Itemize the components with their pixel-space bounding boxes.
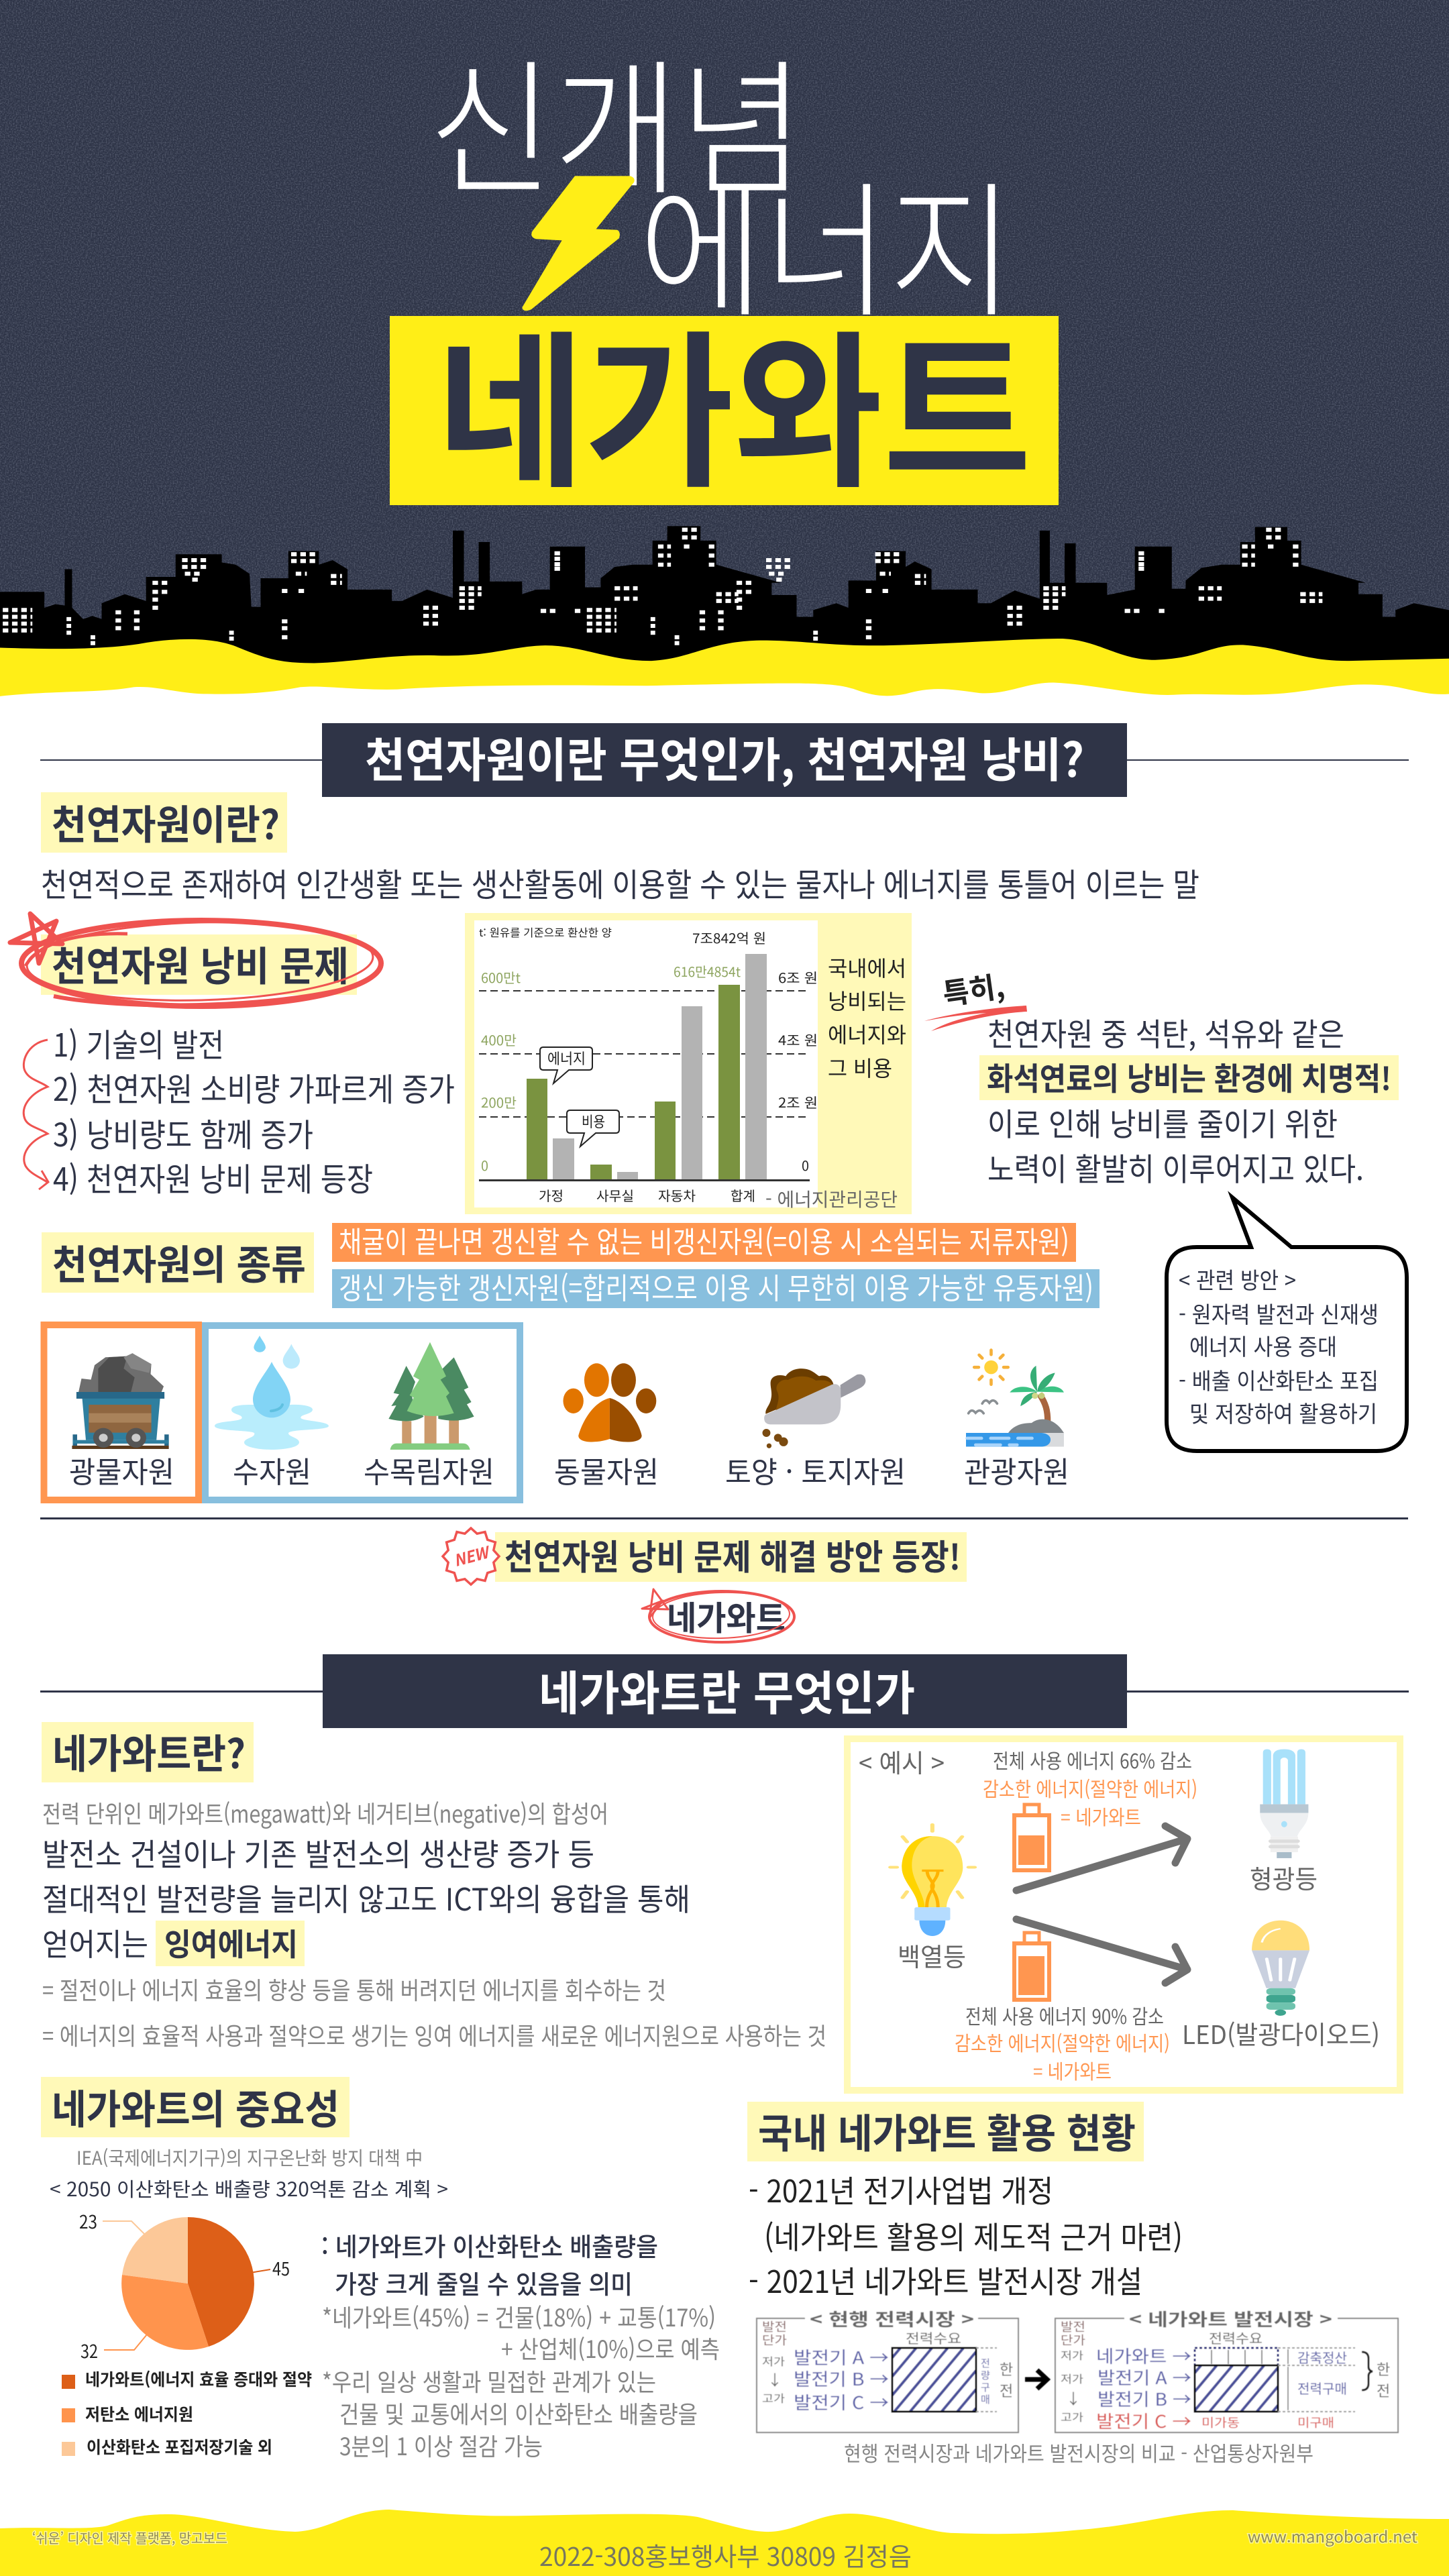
- arrow: to LED: [1016, 1919, 1187, 1983]
- text block: importance: *네가와트(45%) = 건물(18%) + 교통(17%): [322, 2299, 716, 2334]
- heading: 네가와트의 중요성: 네가와트의 중요성: [52, 2078, 339, 2136]
- label: 수목림자원: 수목림자원: [364, 1448, 494, 1491]
- chart labels: 자동차: [658, 1185, 696, 1205]
- right market: 미구매: [1297, 2414, 1334, 2431]
- section header: 네가와트: [40, 1654, 1409, 1728]
- red star: [10, 914, 62, 963]
- text: LED savings: [955, 2000, 1170, 2085]
- chart labels: 0: [802, 1155, 809, 1175]
- icon: beach: [966, 1350, 1064, 1447]
- footer credit left: ‘쉬운’ 디자인 제작 플랫폼, 망고보드: [32, 2528, 227, 2547]
- label: 수자원: 수자원: [233, 1448, 311, 1491]
- left market: [757, 2306, 1018, 2432]
- right market: 한: [1377, 2358, 1390, 2379]
- icon: battery 66%: [1012, 1805, 1051, 1872]
- right market: 발전기 A →: [1097, 2365, 1191, 2390]
- icon: mine cart: [72, 1353, 169, 1449]
- yellow wave: [0, 639, 1449, 696]
- icon: forest: [388, 1342, 474, 1450]
- title box: 네가와트: 네가와트: [436, 278, 1032, 521]
- values: 45: [272, 2255, 290, 2281]
- section header: 천연자원: [40, 723, 1409, 797]
- callout heading: 특히: [924, 963, 1027, 1031]
- chart labels: 200만: [481, 1092, 517, 1112]
- speech bubble: 관련 방안: [1167, 1197, 1407, 1451]
- highlight: 잉여에너지: [156, 1921, 305, 1966]
- footer url: www.mangoboard.net: [1248, 2524, 1417, 2547]
- heading: 천연자원 낭비 문제: [10, 914, 381, 1006]
- legend: [62, 2367, 312, 2459]
- label: 관광자원: 관광자원: [964, 1448, 1069, 1491]
- legend: 네가와트(에너지 효율 증대와 절약: [85, 2367, 312, 2391]
- label: 백열등: 백열등: [898, 1937, 966, 1974]
- speech bubble: 관련 방안: - 배출 이산화탄소 포집: [1179, 1363, 1379, 1396]
- heading: 천연자원이란?: 천연자원이란?: [52, 793, 280, 851]
- text: fluorescent savings: 감소한 에너지(절약한 에너지): [983, 1773, 1197, 1803]
- right market: 전력구매: [1297, 2378, 1347, 2398]
- text block: domestic status: (네가와트 활용의 제도적 근거 마련): [764, 2214, 1183, 2258]
- right market: 네가와트 →: [1096, 2343, 1191, 2368]
- icon: NEW badge: NEW: [451, 1539, 493, 1571]
- text block: domestic status: - 2021년 네가와트 발전시장 개설: [749, 2258, 1142, 2302]
- left market: ↓: [767, 2369, 782, 2390]
- icon: incandescent bulb: [890, 1825, 975, 1936]
- chart labels: 4조 원: [778, 1030, 818, 1049]
- icon: soil scoop: [762, 1368, 865, 1448]
- speech bubble: 관련 방안: < 관련 방안 >: [1179, 1263, 1296, 1295]
- chart labels: 0: [481, 1155, 488, 1175]
- icon: water: [215, 1336, 329, 1450]
- text block: domestic status: [749, 2167, 1183, 2302]
- text: IEA note: IEA(국제에너지기구)의 지구온난화 방지 대책 中: [76, 2144, 423, 2171]
- right market: 발전기 B →: [1097, 2386, 1191, 2411]
- band: 갱신자원: 갱신 가능한 갱신자원(=합리적으로 이용 시 무한히 이용 가능한 유동자원): [339, 1265, 1093, 1307]
- right market: 고가: [1061, 2408, 1083, 2424]
- speech bubble: 관련 방안: 에너지 사용 증대: [1189, 1329, 1337, 1362]
- highlight: [979, 1055, 1399, 1100]
- banner: solution appears: 천연자원 낭비 문제 해결 방안 등장!: [504, 1529, 961, 1580]
- text block: negawatt definition: = 절전이나 에너지 효율의 향상 등을 통해 버려지던 에너지를 회수하는 것: [42, 1972, 666, 2006]
- callout: 비용: [567, 1110, 619, 1146]
- right market: 발전기 C →: [1096, 2408, 1191, 2433]
- text block: importance: : 네가와트가 이산화탄소 배출량을: [321, 2226, 658, 2263]
- chart labels: 6조 원: [778, 967, 818, 987]
- chart title text: [828, 952, 906, 1083]
- right market: 단가: [1061, 2331, 1085, 2349]
- text: fluorescent savings: [983, 1745, 1197, 1831]
- chart source: - 에너지관리공단: [765, 1185, 898, 1212]
- leader lines: [250, 2269, 270, 2273]
- callout heading: 특히: 특히,: [940, 963, 1007, 1014]
- heading: 국내 네가와트 활용 현황: 국내 네가와트 활용 현황: [758, 2102, 1136, 2160]
- right market: 감축정산: [1297, 2347, 1347, 2367]
- text block: importance: 3분의 1 이상 절감 가능: [339, 2428, 543, 2463]
- text block: importance: 가장 크게 줄일 수 있음을 의미: [335, 2264, 633, 2301]
- right market: 저가: [1061, 2370, 1083, 2386]
- chart labels: 합계: [731, 1185, 755, 1205]
- chart labels: 2조 원: [778, 1092, 818, 1112]
- pie chart: [79, 2208, 290, 2363]
- pie chart: 32: [80, 2337, 98, 2363]
- callout: 비용: 비용: [582, 1110, 605, 1132]
- caption: market comparison: 현행 전력시장과 네가와트 발전시장의 비교 - 산업통상자원부: [844, 2437, 1313, 2467]
- divider: [40, 1517, 1408, 1519]
- left market: 매: [981, 2392, 990, 2406]
- text block: negawatt definition: [42, 1795, 826, 2052]
- icon: battery 90%: [1012, 1933, 1051, 2002]
- text: LED savings: 감소한 에너지(절약한 에너지): [955, 2027, 1170, 2057]
- text block: fossil fuels: [979, 1009, 1399, 1190]
- list: causes: 1) 기술의 발전: [53, 1019, 224, 1066]
- text: fluorescent savings: 전체 사용 에너지 66% 감소: [993, 1745, 1192, 1774]
- chart labels: t: 원유를 기준으로 환산한 양: [479, 924, 612, 940]
- text block: importance: 건물 및 교통에서의 이산화탄소 배출량을: [339, 2396, 698, 2430]
- chart title text: 국내에서: [828, 952, 906, 983]
- right market: 미가동: [1201, 2414, 1240, 2431]
- right market: 전: [1377, 2379, 1390, 2401]
- chart labels: 600만t: [481, 967, 521, 987]
- pie chart: 23: [79, 2208, 97, 2234]
- legend: 저탄소 에너지원: [85, 2402, 193, 2426]
- left market: 구: [981, 2380, 990, 2394]
- text block: negawatt definition: 얻어지는: [42, 1921, 148, 1965]
- text block: fossil fuels: 화석연료의 낭비는 환경에 치명적!: [987, 1053, 1391, 1099]
- text block: negawatt definition: 절대적인 발전량을 늘리지 않고도 ICT와의 융합을 통해: [42, 1876, 690, 1920]
- label: 토양·토지자원: 토양 · 토지자원: [725, 1448, 906, 1491]
- list: causes: [23, 1019, 455, 1200]
- title: 에너지: 에너지: [639, 134, 1014, 346]
- city skyline: [0, 526, 1449, 696]
- band: 비갱신자원: 채굴이 끝나면 갱신할 수 없는 비갱신자원(=이용 시 소실되는 저류자원): [339, 1218, 1069, 1261]
- icon: paw: [563, 1363, 656, 1442]
- title: 신개념: 신개념: [428, 12, 805, 224]
- icon: fluorescent lamp: [1260, 1749, 1308, 1858]
- left market: 발전기 A →: [794, 2345, 889, 2369]
- heading: 천연자원의 종류: 천연자원의 종류: [52, 1233, 306, 1291]
- text block: negawatt definition: 발전소 건설이나 기존 발전소의 생산량 증가 등: [42, 1831, 594, 1875]
- text: 2050 plan: < 2050 이산화탄소 배출량 320억톤 감소 계획 >: [50, 2174, 448, 2202]
- resource frame: non-renewable: [44, 1325, 199, 1500]
- text block: importance: + 산업체(10%)으로 예측: [501, 2330, 720, 2365]
- circled keyword: 네가와트: 네가와트: [667, 1592, 786, 1640]
- text: LED savings: = 네가와트: [1033, 2055, 1112, 2085]
- chart title text: 낭비되는: [828, 985, 906, 1016]
- callout: 에너지: 에너지: [547, 1047, 586, 1069]
- icon: lightning bolt: [522, 176, 635, 311]
- label: LED: LED(발광다이오드): [1182, 2015, 1380, 2051]
- resource frame: renewable: [205, 1326, 520, 1500]
- text: LED savings: 전체 사용 에너지 90% 감소: [965, 2000, 1164, 2030]
- right market: [1055, 2306, 1398, 2433]
- right market: 저가: [1061, 2347, 1083, 2363]
- chart title text: 에너지와: [828, 1018, 906, 1049]
- list: causes: 3) 낭비량도 함께 증가: [53, 1109, 313, 1156]
- list: causes: 4) 천연자원 낭비 문제 등장: [53, 1153, 373, 1200]
- left market: 발전기 B →: [794, 2366, 889, 2391]
- heading: 네가와트란?: 네가와트란?: [52, 1722, 246, 1780]
- red hand-drawn ellipse: [21, 918, 381, 1006]
- left market: < 현행 전력시장 >: [810, 2306, 974, 2331]
- left market: 저가: [762, 2353, 785, 2369]
- left market: 고가: [762, 2390, 785, 2406]
- chart labels: 616만4854t: [674, 961, 741, 981]
- text block: fossil fuels: 천연자원 중 석탄, 석유와 같은: [987, 1009, 1344, 1055]
- speech bubble: 관련 방안: 및 저장하여 활용하기: [1189, 1396, 1377, 1429]
- text block: negawatt definition: 잉여에너지: [164, 1921, 298, 1965]
- list: causes: 2) 천연자원 소비량 가파르게 증가: [53, 1063, 455, 1110]
- footer approval number: 2022-308홍보행사부 30809 김정음: [539, 2536, 912, 2573]
- left market: 발전기 C →: [794, 2390, 889, 2414]
- diagram: market comparison: [757, 2306, 1398, 2433]
- definition text: 천연적으로 존재하여 인간생활 또는 생산활동에 이용할 수 있는 물자나 에너지를 통틀어 이르는 말: [41, 859, 1199, 906]
- text block: importance: [321, 2226, 720, 2463]
- arrow: to fluorescent: [1016, 1826, 1187, 1890]
- right market: ↓: [1066, 2387, 1081, 2409]
- chart labels: 가정: [539, 1185, 564, 1205]
- text: fluorescent savings: = 네가와트: [1061, 1801, 1141, 1831]
- text block: fossil fuels: 이로 인해 낭비를 줄이기 위한: [987, 1099, 1338, 1145]
- chart labels: 400만: [481, 1030, 517, 1049]
- text block: negawatt definition: 전력 단위인 메가와트(megawatt)와 네거티브(negative)의 합성어: [42, 1795, 608, 1830]
- icon: LED bulb: [1252, 1921, 1309, 2016]
- right market: 발전: [1061, 2318, 1085, 2335]
- left market: 전: [981, 2356, 990, 2370]
- left market: 량: [981, 2368, 990, 2382]
- right market: < 네가와트 발전시장 >: [1129, 2306, 1332, 2331]
- gridlines: [479, 991, 810, 1117]
- chart title text: 그 비용: [828, 1052, 892, 1083]
- heading: 천연자원 낭비 문제: 천연자원 낭비 문제: [52, 934, 349, 993]
- section header: 네가와트: 네가와트란 무엇인가: [539, 1656, 915, 1724]
- chart labels: 사무실: [596, 1185, 634, 1205]
- left market: 발전: [762, 2318, 787, 2335]
- arrow: market transition: [1025, 2370, 1047, 2389]
- text block: domestic status: - 2021년 전기사업법 개정: [749, 2167, 1053, 2212]
- label: 형광등: 형광등: [1250, 1859, 1318, 1896]
- left market: 전: [1000, 2379, 1013, 2401]
- left market: 전력수요: [906, 2328, 961, 2347]
- panel: energy waste chart: [465, 913, 912, 1214]
- text block: importance: *우리 일상 생활과 밀접한 관계가 있는: [322, 2363, 656, 2398]
- speech bubble: 관련 방안: - 원자력 발전과 신재생: [1179, 1297, 1379, 1330]
- legend: 이산화탄소 포집저장기술 외: [87, 2434, 272, 2459]
- label: 광물자원: 광물자원: [69, 1448, 174, 1491]
- text block: fossil fuels: 노력이 활발히 이루어지고 있다.: [987, 1144, 1364, 1190]
- hero banner: [0, 0, 1449, 696]
- callout: 에너지: [540, 1047, 592, 1083]
- label: 동물자원: 동물자원: [554, 1448, 659, 1491]
- panel: example: < 예시 >: [859, 1743, 945, 1780]
- section header: 천연자원: 천연자원이란 무엇인가, 천연자원 낭비?: [365, 723, 1084, 791]
- bars: [479, 954, 810, 1181]
- text block: negawatt definition: = 에너지의 효율적 사용과 절약으로 생기는 잉여 에너지를 새로운 에너지원으로 사용하는 것: [42, 2017, 826, 2052]
- arrow: red flow connector: [23, 1040, 48, 1189]
- footer wave: [0, 2510, 1449, 2576]
- chart labels: 7조842억 원: [692, 928, 766, 947]
- icon: NEW badge: [443, 1528, 499, 1585]
- left market: 단가: [762, 2331, 787, 2349]
- right market: 전력수요: [1209, 2328, 1263, 2347]
- chart labels: [479, 924, 818, 1205]
- panel: example: [847, 1739, 1400, 2090]
- left market: 한: [1000, 2358, 1013, 2379]
